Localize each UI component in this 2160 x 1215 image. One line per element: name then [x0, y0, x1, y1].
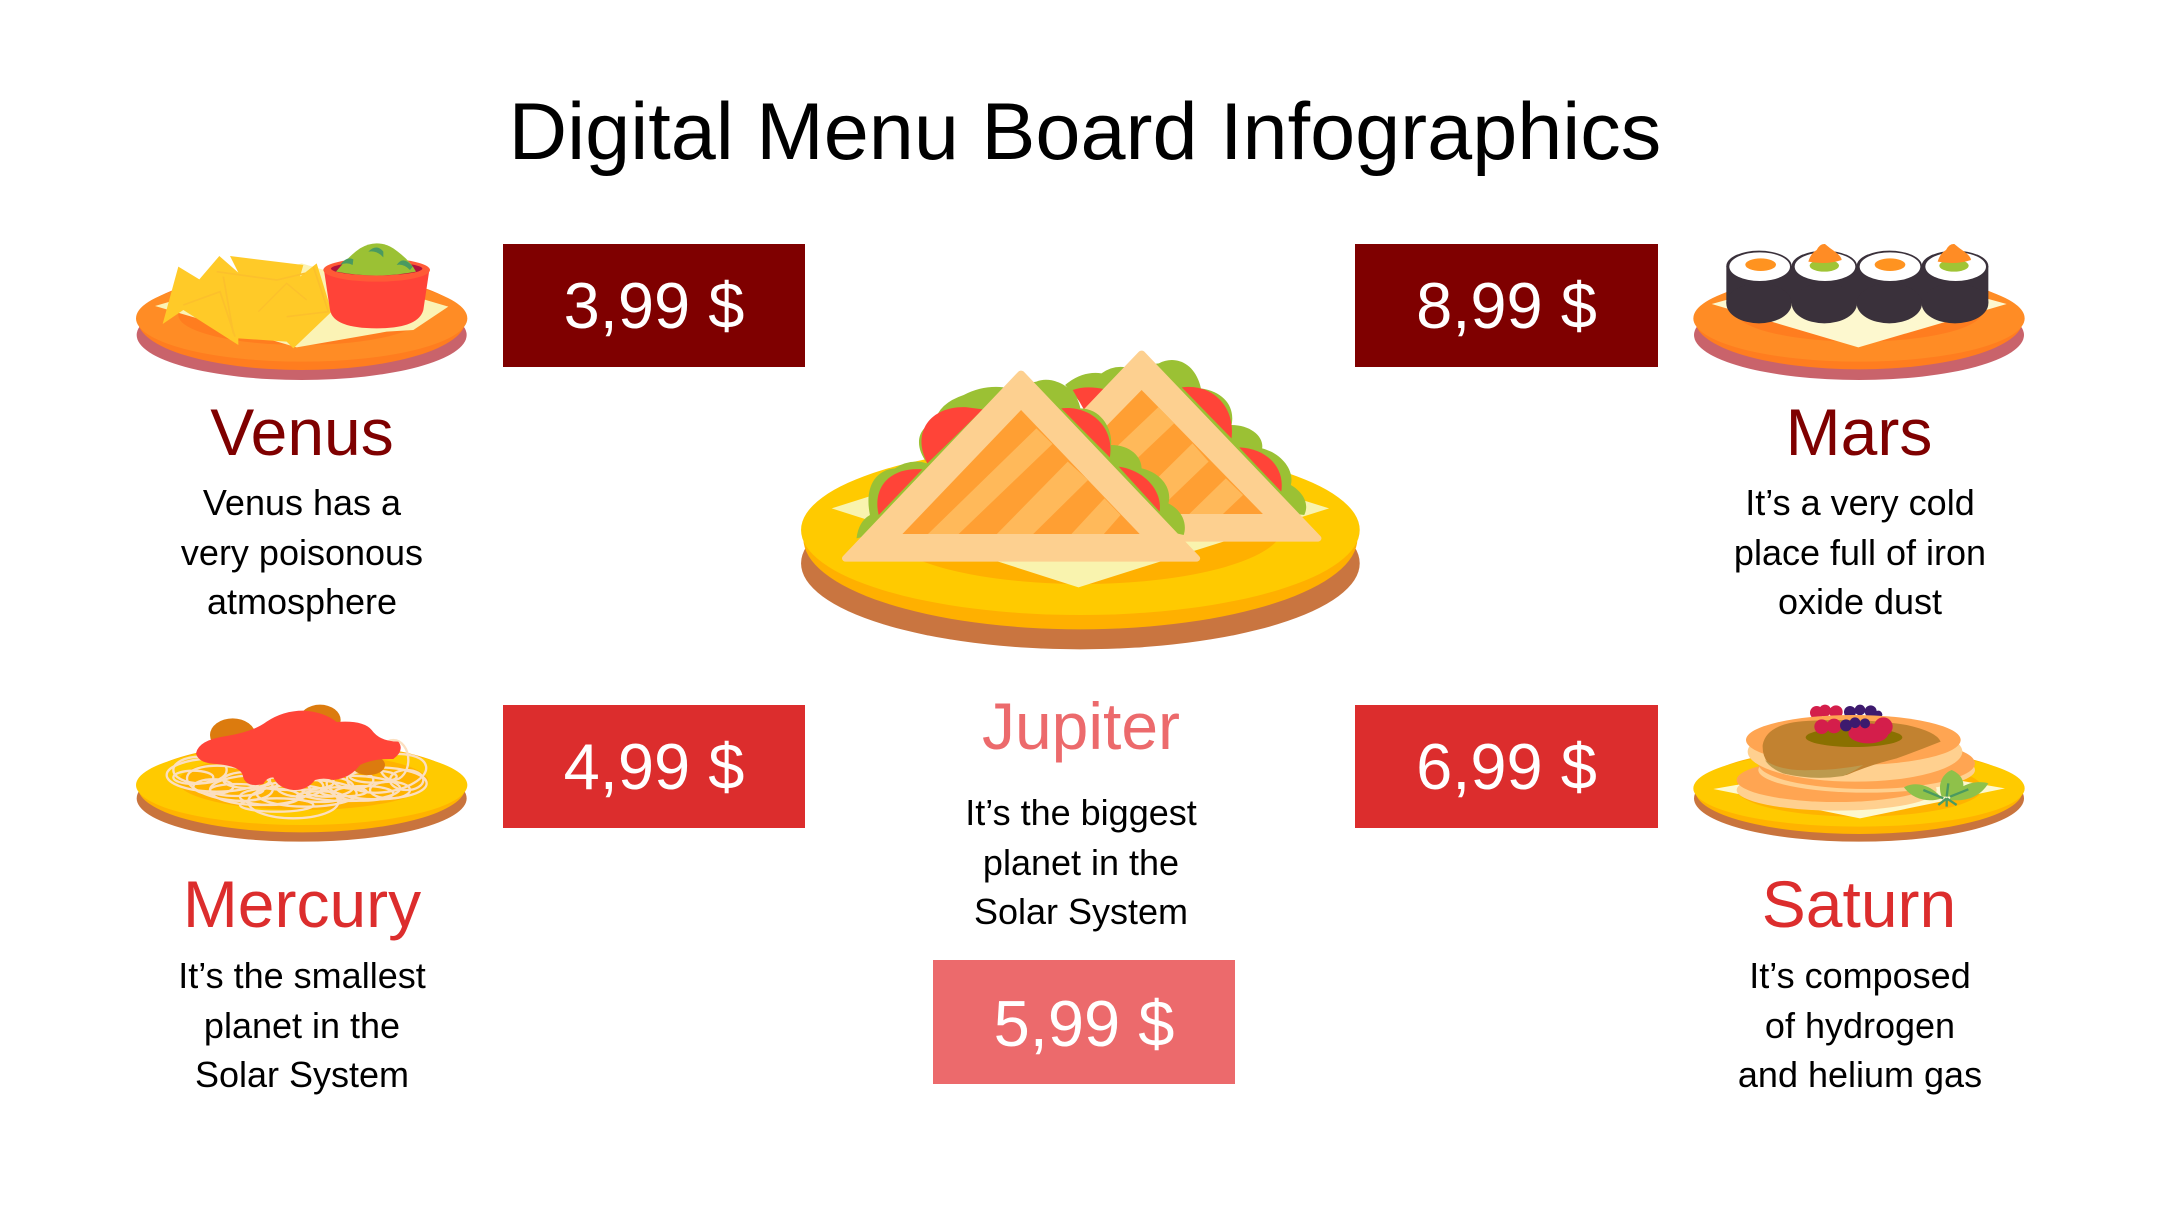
- text: Venus description: [181, 482, 423, 622]
- price: 4,99 $: [503, 705, 805, 828]
- icon: sushi plate: [1693, 244, 2025, 380]
- price: 4,99 $: 4,99 $: [564, 730, 744, 803]
- text: Mercury description: It’s the smallest: [178, 955, 426, 996]
- price: 8,99 $: 8,99 $: [1416, 269, 1597, 342]
- text: Venus description: very poisonous: [181, 532, 423, 573]
- price: 6,99 $: 6,99 $: [1416, 730, 1597, 803]
- heading: Jupiter: Jupiter: [982, 689, 1180, 763]
- text: Mars description: It’s a very cold: [1745, 482, 1975, 523]
- price: 5,99 $: [933, 960, 1235, 1084]
- text: Saturn description: It’s composed: [1749, 955, 1971, 996]
- panel: Saturn: [1355, 704, 2025, 1095]
- text: Mercury description: [178, 955, 426, 1095]
- title: Digital Menu Board Infographics: [509, 87, 1661, 177]
- text: Jupiter description: It’s the biggest: [965, 792, 1197, 833]
- back sandwich: [1065, 350, 1322, 542]
- icon: sandwich plate: [801, 350, 1360, 650]
- text: Venus description: Venus has a: [203, 482, 401, 523]
- text: Mars description: place full of iron: [1734, 532, 1986, 573]
- text: Mars description: oxide dust: [1778, 581, 1942, 622]
- front sandwich: [846, 374, 1196, 558]
- text: Venus description: atmosphere: [207, 581, 397, 622]
- text: Saturn description: [1738, 955, 1982, 1095]
- price: 8,99 $: [1355, 244, 1658, 367]
- text: Jupiter description: planet in the: [983, 842, 1179, 883]
- price: 3,99 $: 3,99 $: [564, 269, 744, 342]
- panel: Mercury: [136, 704, 805, 1095]
- panel: Jupiter: [801, 350, 1360, 1084]
- text: Mercury description: planet in the: [204, 1005, 400, 1046]
- price: 3,99 $: [503, 244, 805, 367]
- text: Mars description: [1734, 482, 1986, 622]
- price: 5,99 $: 5,99 $: [994, 987, 1174, 1060]
- heading: Mars: Mars: [1786, 395, 1932, 469]
- icon: spaghetti plate: [136, 704, 468, 842]
- panel: Venus: [136, 243, 805, 622]
- text: Jupiter description: Solar System: [974, 891, 1188, 932]
- heading: Mercury: Mercury: [183, 867, 421, 941]
- text: Saturn description: and helium gas: [1738, 1054, 1982, 1095]
- price: 6,99 $: [1355, 705, 1658, 828]
- icon: pancake plate: [1693, 704, 2025, 842]
- text: Jupiter description: [965, 792, 1197, 932]
- heading: Venus: Venus: [210, 395, 394, 469]
- icon: nachos and guacamole plate: [136, 243, 468, 380]
- text: Mercury description: Solar System: [195, 1054, 409, 1095]
- text: Saturn description: of hydrogen: [1765, 1005, 1955, 1046]
- panel: Mars: [1355, 244, 2025, 622]
- heading: Saturn: Saturn: [1762, 867, 1956, 941]
